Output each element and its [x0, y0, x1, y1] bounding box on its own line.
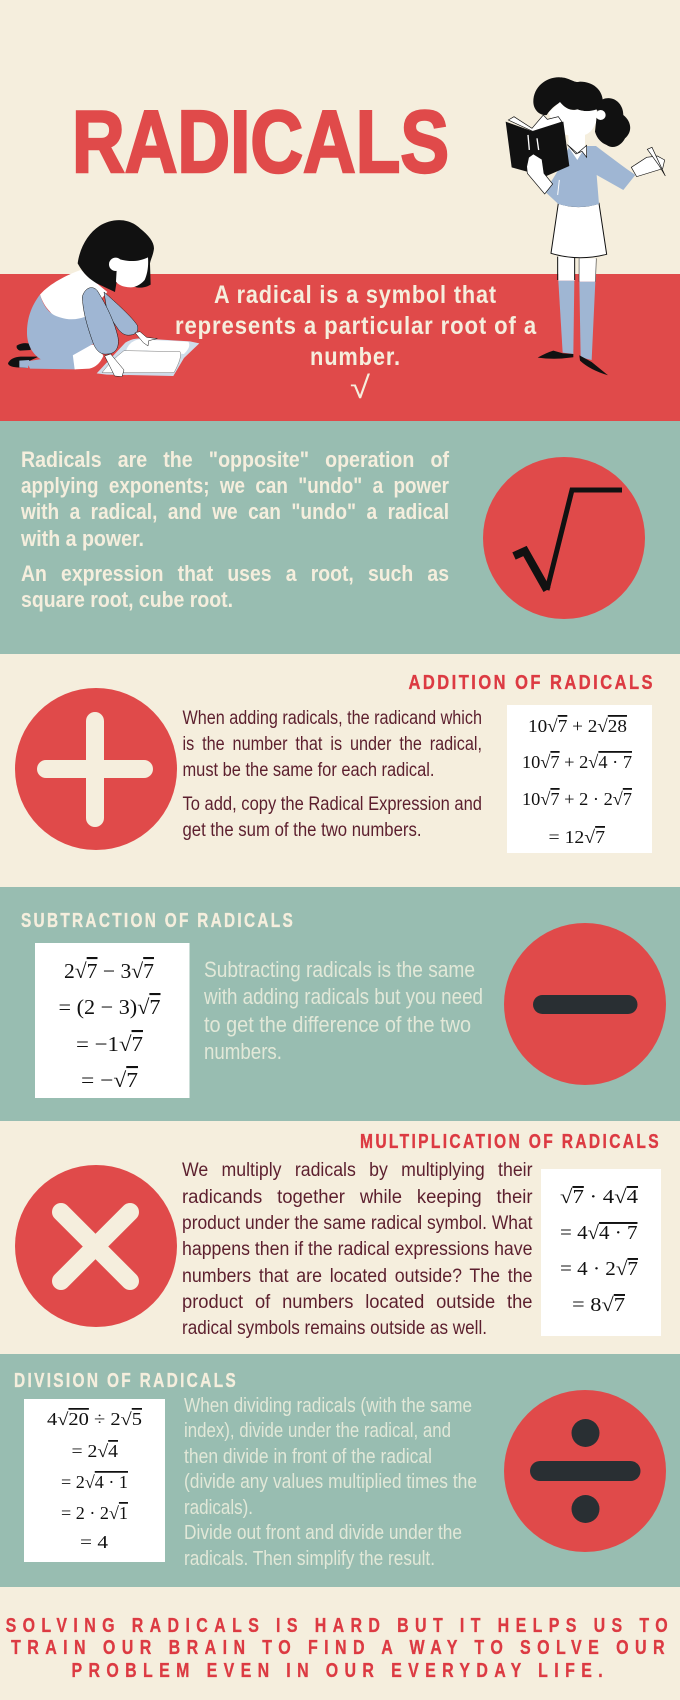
division text: When dividing radicals (with the same: [184, 1395, 472, 1417]
heading: division: DIVISION OF RADICALS: [14, 1370, 238, 1392]
math: subtraction example: [35, 943, 190, 1098]
definition text: [175, 281, 537, 405]
definition text: A radical is a symbol that: [214, 281, 497, 309]
math: multiplication example: = 8√ 7: [572, 1295, 625, 1316]
math: subtraction example: = −1√7: [76, 1032, 143, 1056]
subtraction text: [203, 957, 483, 1064]
math: multiplication example: = 4√4 · 7: [560, 1223, 638, 1244]
math: multiplication example: = 4 · 2√ 7: [560, 1259, 638, 1280]
panel: what radicals are: [0, 421, 680, 654]
addition text: get the sum of the two numbers.: [182, 820, 422, 841]
intro text: square root, cube root.: [21, 587, 233, 612]
math: addition example: = 12√7: [548, 827, 605, 847]
icon: minus: [504, 923, 666, 1085]
math: multiplication example: √7 · 4√ 4: [560, 1187, 638, 1208]
intro text: with a power.: [20, 526, 144, 551]
multiplication text: happens then if the radical expressions have: [182, 1239, 532, 1260]
intro text: applying exponents; we can "undo" a power: [21, 473, 449, 498]
subtraction text: to get the difference of the two: [204, 1012, 471, 1037]
multiplication text: radical symbols remains outside as well.: [182, 1318, 487, 1339]
panel: multiplication: [15, 1131, 661, 1339]
math: multiplication example: [541, 1169, 661, 1336]
addition text: is the number that is under the radical,: [182, 734, 482, 755]
division text: radicals. Then simplify the result.: [184, 1548, 435, 1570]
math: subtraction example: 2√7 − 3√7: [64, 959, 154, 983]
multiplication text: numbers that are located outside? The the: [182, 1266, 532, 1287]
multiplication text: product of numbers located outside the: [182, 1292, 532, 1313]
math: subtraction example: = −√7: [81, 1068, 138, 1092]
division text: then divide in front of the radical: [184, 1446, 432, 1468]
intro text: [20, 447, 450, 612]
math: division example: 4√20 ÷ 2√ 5: [47, 1409, 142, 1429]
intro text: An expression that uses a root, such as: [21, 561, 449, 586]
definition text: number.: [310, 343, 401, 371]
addition text: When adding radicals, the radicand which: [182, 708, 482, 729]
icon: plus: [15, 688, 177, 850]
icon: divide: [504, 1390, 666, 1552]
title: RADICALS: [72, 92, 449, 191]
icon: radical symbol in red circle: [483, 457, 645, 619]
intro text: Radicals are the "opposite" operation of: [21, 447, 450, 472]
panel: division: [0, 1354, 680, 1587]
illustration: kneeling girl reading: [8, 220, 199, 377]
definition text: √: [350, 370, 370, 405]
multiplication text: radicands together while keeping their: [182, 1187, 533, 1208]
division text: [184, 1395, 477, 1570]
multiplication text: product under the same radical symbol. What: [182, 1213, 533, 1234]
division text: (divide any values multiplied times the: [184, 1471, 477, 1493]
division text: Divide out front and divide under the: [184, 1522, 462, 1544]
subtraction text: numbers.: [204, 1039, 282, 1064]
addition text: To add, copy the Radical Expression and: [182, 794, 482, 815]
heading: subtraction: SUBTRACTION OF RADICALS: [21, 910, 295, 932]
multiplication text: We multiply radicals by multiplying their: [182, 1160, 533, 1181]
multiplication text: [182, 1160, 533, 1339]
math: division example: = 4: [80, 1532, 108, 1552]
icon: times: [15, 1165, 177, 1327]
division text: radicals).: [184, 1497, 253, 1519]
math: addition example: 10√7 + 2√4 · 7: [522, 752, 632, 772]
math: addition example: 10√7 + 2 · 2√7: [522, 789, 632, 809]
intro text: with a radical, and we can "undo" a radical: [20, 499, 449, 524]
math: division example: = 2√4 · 1: [61, 1472, 128, 1492]
math: addition example: [507, 705, 652, 853]
illustration: standing girl with book and pen: [506, 77, 665, 375]
math: division example: [24, 1399, 165, 1562]
math: addition example: 10√7 + 2√28: [528, 716, 627, 736]
panel: definition band: [0, 274, 680, 421]
math: division example: = 2√4: [72, 1441, 118, 1461]
closing message: [6, 1615, 674, 1682]
definition text: represents a particular root of a: [175, 312, 537, 340]
panel: addition: [15, 672, 655, 853]
subtraction text: with adding radicals but you need: [203, 984, 483, 1009]
math: division example: = 2 · 2√1: [61, 1503, 128, 1523]
addition text: [182, 708, 482, 841]
division text: index), divide under the radical, and: [184, 1420, 451, 1442]
addition text: must be the same for each radical.: [182, 760, 434, 781]
panel: subtraction: [0, 887, 680, 1121]
subtraction text: Subtracting radicals is the same: [204, 957, 475, 982]
math: subtraction example: = (2 − 3)√7: [58, 995, 160, 1019]
